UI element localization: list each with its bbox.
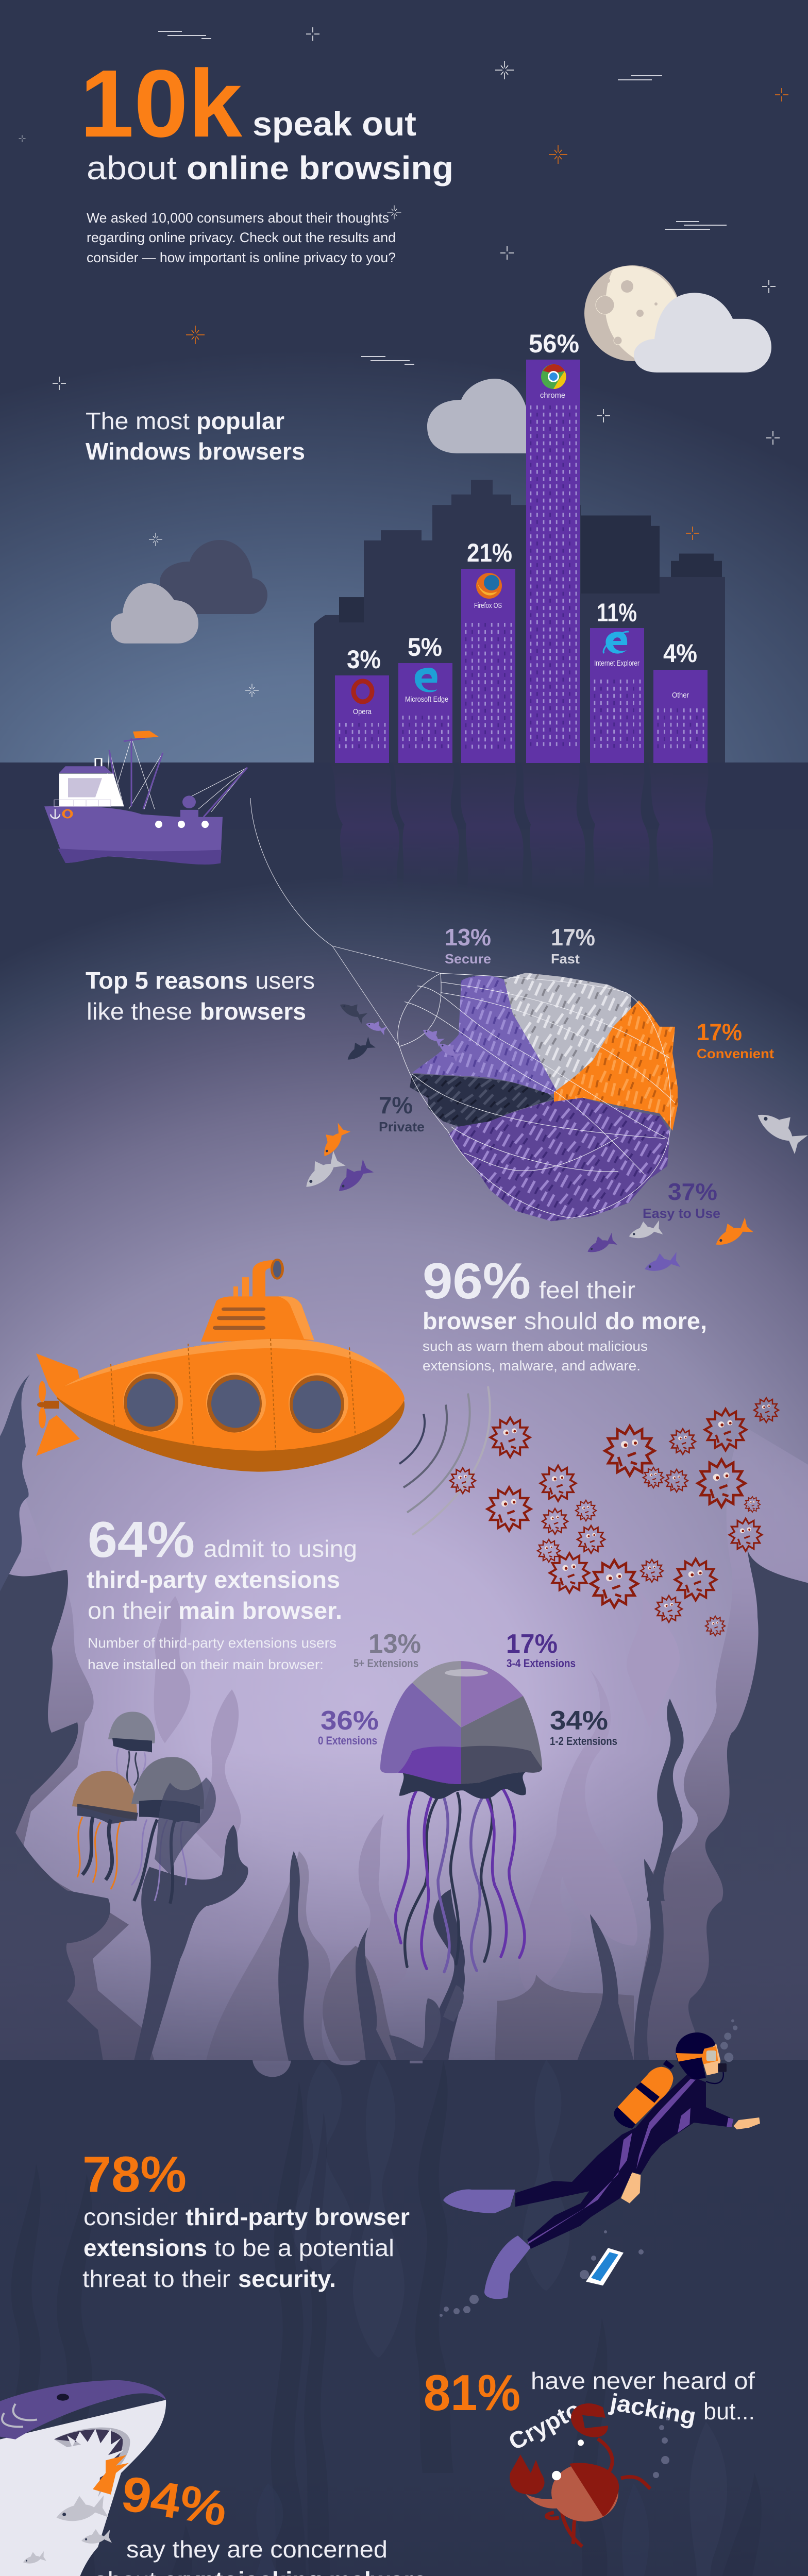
stat: 78%: to be a potential [214, 2234, 394, 2261]
pie labels [379, 924, 774, 1221]
shark [0, 2380, 166, 2576]
far lavender seaweed [154, 1591, 680, 1995]
bar: Chrome 56% [526, 329, 580, 763]
slice: 17% 3-4 extensions [461, 1661, 523, 1727]
bar: Firefox 21%: 21% [467, 538, 512, 567]
stat: 78%: 78% [82, 2146, 187, 2202]
heading: top 5 reasons: browsers [200, 998, 306, 1025]
pie labels: Convenient [697, 1046, 774, 1061]
pie labels: Private [379, 1119, 425, 1134]
stat: 64%: 64% [88, 1511, 195, 1568]
stat: 96% [423, 1252, 707, 1374]
pie chart: fish caught in net [398, 973, 678, 1221]
stat: 96%: such as warn them about malicious [423, 1338, 648, 1354]
heading: popular browsers: Windows browsers [86, 438, 305, 465]
mid grey seaweed masses [0, 1425, 808, 2061]
tail fins and propeller [36, 1353, 80, 1456]
stat: 64%: admit to using [204, 1535, 357, 1562]
stat: 78%: threat to their [82, 2265, 230, 2292]
light cloud [111, 583, 198, 643]
stat: 78% [82, 2146, 410, 2292]
foreground dark seaweed over small jellies [155, 1777, 216, 1875]
stat: 96%: feel their [539, 1277, 635, 1303]
stat: 78%: security. [238, 2265, 336, 2292]
title: about [87, 149, 177, 187]
slice: 13% 5+ extensions [412, 1661, 461, 1727]
stat: 64%: Number of third-party extensions users [88, 1635, 336, 1651]
bar: Chrome 56%: 56% [529, 329, 579, 358]
sonar waves [399, 1386, 490, 1535]
slice: private 7% [410, 1074, 554, 1127]
jellyfish labels: 36% [321, 1706, 379, 1736]
heading: top 5 reasons [86, 967, 315, 1025]
intro text: We asked 10,000 consumers about their thoughts [87, 210, 389, 226]
title: online browsing [187, 149, 453, 187]
skyline silhouette [314, 480, 725, 762]
jellyfish labels: 3-4 Extensions [507, 1657, 576, 1670]
stat: 81% with crab: but... [703, 2398, 755, 2425]
portholes [123, 1371, 348, 1433]
jellyfish pie chart [380, 1661, 542, 1972]
fins [443, 2190, 531, 2299]
small jellyfish group [72, 1711, 204, 1904]
bar: Opera 3% [335, 645, 389, 763]
pie labels: 7% [379, 1092, 413, 1118]
heading: popular browsers [86, 408, 305, 465]
heading: popular browsers: popular [196, 408, 284, 434]
stat: 96%: 96% [423, 1252, 531, 1309]
fishing boat [44, 731, 247, 865]
fish near shark [21, 2491, 112, 2567]
heading: top 5 reasons: users [255, 967, 315, 994]
bar: Microsoft Edge 5%: 5% [408, 633, 442, 662]
bar: Internet Explorer 11%: 11% [597, 598, 637, 627]
dark foreground seaweed [0, 1549, 808, 2061]
net strands [398, 973, 675, 1218]
jellyfish labels: 5+ Extensions [354, 1657, 418, 1670]
stars in the sky [19, 27, 788, 697]
slice: fast 17% [504, 973, 631, 1092]
stat: 96%: extensions, malware, and adware. [423, 1358, 641, 1374]
stat: 64%: third-party extensions [87, 1566, 340, 1593]
intro text [87, 210, 396, 265]
title [80, 50, 453, 187]
crab [510, 2403, 650, 2547]
stat: 64% [87, 1511, 357, 1672]
stat: 96%: do more, [605, 1308, 707, 1334]
stat: 94% [73, 2466, 487, 2576]
pie labels: Secure [445, 951, 491, 967]
jellyfish labels: 0 Extensions [318, 1734, 377, 1747]
cloud in front of moon [634, 293, 771, 372]
tentacles [395, 1788, 525, 1972]
pie labels: Fast [551, 951, 580, 967]
stat: 64%: on their [88, 1597, 171, 1624]
slice: 36% 0 extensions [380, 1683, 461, 1784]
bar: Microsoft Edge 5%: Microsoft Edge [405, 695, 448, 704]
stat: 96%: should [524, 1308, 598, 1334]
heading: popular browsers: The most [86, 408, 190, 434]
slice: convenient 17% [554, 1001, 678, 1130]
title: 10k [80, 50, 243, 157]
jellyfish labels: 1-2 Extensions [550, 1735, 617, 1748]
jellyfish labels: 17% [506, 1629, 558, 1659]
dark cloud [160, 540, 267, 614]
bar chart: browsers as towers [335, 329, 708, 763]
deep ocean [0, 2060, 808, 2576]
bar: Internet Explorer 11% [590, 598, 644, 763]
stat: 64%: main browser. [178, 1597, 342, 1624]
jellyfish labels [318, 1629, 617, 1748]
background: night sky [0, 0, 808, 764]
diver [440, 2019, 760, 2317]
stat: 64%: have installed on their main browser: [88, 1657, 324, 1672]
building reflections [330, 762, 714, 891]
bar: Opera 3%: Opera [353, 707, 372, 716]
center strand behind jellyfish [389, 1889, 465, 2061]
bar: Firefox 21% [461, 538, 515, 763]
pie labels: 17% [551, 924, 595, 951]
jellyfish labels: 13% [368, 1629, 421, 1659]
stat: 96%: browser [423, 1308, 516, 1334]
stat: 94%: 94% [118, 2466, 231, 2537]
pie labels: 17% [697, 1019, 742, 1045]
stat: 94%: say they are concerned [126, 2536, 388, 2563]
bar: Other 4% [653, 639, 708, 763]
bar: Other 4%: Other [672, 691, 689, 700]
heading: top 5 reasons: Top 5 reasons [86, 967, 248, 994]
jellyfish labels: 34% [550, 1706, 608, 1736]
stat: 81% with crab: have never heard of [531, 2367, 755, 2394]
cloud behind chrome tower [427, 379, 526, 453]
pie labels: 37% [668, 1178, 717, 1205]
stat: 81% with crab: Crypto [504, 2395, 585, 2455]
title: speak out [252, 105, 416, 143]
stray fish around net [297, 997, 808, 1276]
slice: easy to use 37% [448, 1098, 670, 1221]
stat: 81% with crab: 81% [424, 2364, 520, 2421]
bar: Firefox 21%: Firefox OS [474, 601, 502, 610]
intro text: consider — how important is online privacy to you? [87, 250, 396, 265]
bar: Other 4%: 4% [663, 639, 697, 668]
phone sinking [586, 2248, 624, 2285]
pie labels: 13% [445, 924, 491, 951]
stat: 81% with crab: jacking [608, 2388, 698, 2430]
heading: top 5 reasons: like these [87, 998, 192, 1025]
fishing net line from ship [250, 798, 441, 1046]
stat: 78%: consider [83, 2204, 178, 2230]
seaweed background layers [0, 1375, 808, 2081]
bar: Chrome 56%: chrome [540, 391, 565, 400]
slice: 34% 1-2 extensions [461, 1696, 542, 1784]
stat: 81% with crab [424, 2364, 755, 2547]
stat: 78%: third-party browser [186, 2204, 410, 2230]
water surface [0, 762, 808, 829]
bubbles [440, 2230, 644, 2317]
moon [584, 265, 680, 361]
deep seaweed texture [8, 2060, 771, 2576]
intro text: regarding online privacy. Check out the results and [87, 230, 396, 245]
submarine [36, 1259, 405, 1472]
bar: Opera 3%: 3% [347, 645, 381, 674]
background: ocean water [0, 762, 808, 2081]
slice: secure 13% [412, 976, 558, 1095]
viruses as pufferfish [450, 1398, 779, 1636]
bar: Internet Explorer 11%: Internet Explorer [594, 659, 639, 668]
stat: 78%: extensions [83, 2234, 207, 2261]
pie labels: Easy to Use [643, 1206, 720, 1221]
bar: Microsoft Edge 5% [398, 633, 452, 763]
left strand beside submarine [0, 1375, 30, 1591]
